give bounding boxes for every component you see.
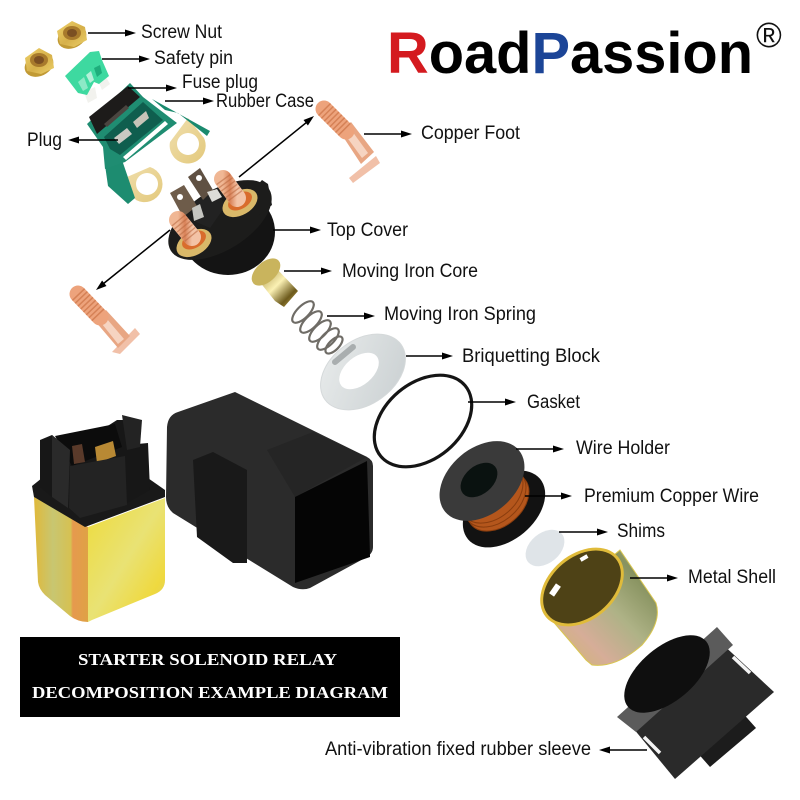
part: wire holder with copper wire xyxy=(424,425,560,563)
black collar xyxy=(32,462,165,527)
product: assembled relay xyxy=(32,415,165,622)
arrow: rubber sleeve xyxy=(599,746,647,754)
product: black rubber boot xyxy=(166,392,373,589)
label: plug: Plug xyxy=(27,130,62,151)
label: moving iron spring: Moving Iron Spring xyxy=(384,304,536,325)
part: gasket xyxy=(356,357,490,485)
label: rubber case: Rubber Case xyxy=(216,91,314,112)
label: screw nut: Screw Nut xyxy=(141,22,223,43)
banner: DECOMPOSITION EXAMPLE DIAGRAM xyxy=(32,683,388,702)
lug ring lower xyxy=(120,167,163,202)
label: safety pin: Safety pin xyxy=(154,48,233,69)
arrow: plug xyxy=(68,136,118,144)
banner: STARTER SOLENOID RELAY xyxy=(78,650,337,669)
arrow: moving iron core xyxy=(284,268,332,274)
logo: RoadPassion: ® xyxy=(756,16,782,55)
arrow: moving iron spring xyxy=(327,312,375,320)
arrow: shims xyxy=(559,528,608,536)
arrow: top cover xyxy=(273,226,321,234)
banner xyxy=(20,637,400,717)
arrow: copper foot xyxy=(364,130,412,138)
label: fuse plug: Fuse plug xyxy=(182,72,258,93)
label: copper foot: Copper Foot xyxy=(421,123,521,144)
part: moving iron core xyxy=(247,253,298,307)
arrow: gasket xyxy=(468,398,516,406)
lug ring upper xyxy=(170,118,206,164)
label: gasket: Gasket xyxy=(527,392,581,413)
label: metal shell: Metal Shell xyxy=(688,567,776,588)
part: metal shell xyxy=(525,532,657,665)
arrow: briquetting block xyxy=(406,352,453,360)
part: screw nuts xyxy=(21,21,90,81)
metal can left face xyxy=(34,497,88,622)
label: wire holder: Wire Holder xyxy=(576,438,671,459)
part: anti-vibration rubber sleeve xyxy=(611,621,774,779)
part: top cover xyxy=(155,164,285,276)
arrow: safety pin xyxy=(102,56,150,62)
label: briquetting block: Briquetting Block xyxy=(462,346,600,367)
arrow: premium copper wire xyxy=(525,492,572,500)
label: moving iron core: Moving Iron Core xyxy=(342,261,478,282)
studs xyxy=(218,183,262,223)
green housing xyxy=(87,83,177,169)
arrow: screw nut xyxy=(88,30,136,36)
housing xyxy=(40,420,150,518)
part: rubber case with plug and lugs xyxy=(87,83,210,204)
arrow: rubber case xyxy=(165,98,214,104)
black fuse socket xyxy=(89,86,140,134)
label: premium copper wire: Premium Copper Wire xyxy=(584,486,759,507)
part: copper foot upper xyxy=(324,109,380,183)
part: copper foot lower xyxy=(78,294,140,354)
spade terminals xyxy=(190,190,226,228)
part: safety pin fuse xyxy=(65,51,110,103)
label: top cover: Top Cover xyxy=(327,220,409,241)
arrow: fuse plug xyxy=(128,84,177,92)
arrow: to lower copper foot xyxy=(96,230,170,290)
part: shims xyxy=(519,522,571,574)
label: rubber sleeve: Anti-vibration fixed rubber sleeve xyxy=(325,739,591,760)
part: briquetting block washer xyxy=(306,318,420,426)
arrow: wire holder xyxy=(516,446,564,452)
metal can right face xyxy=(88,498,165,622)
label: shims: Shims xyxy=(617,521,665,542)
arrow: to upper copper foot xyxy=(239,116,314,177)
green flanges xyxy=(152,99,210,136)
silver terminals xyxy=(114,128,132,144)
part: moving iron spring xyxy=(289,298,345,356)
logo: RoadPassion: RoadPassion xyxy=(387,21,753,86)
arrow: metal shell xyxy=(630,574,678,582)
